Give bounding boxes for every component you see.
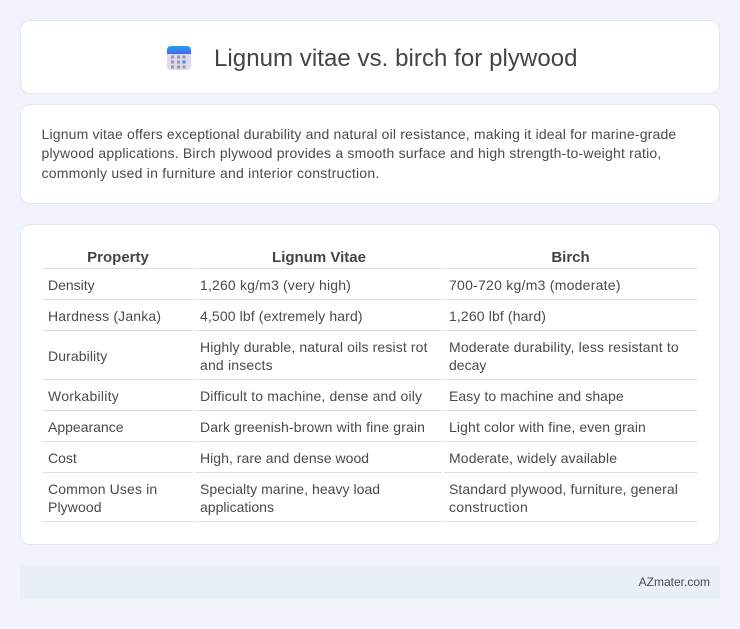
row: Common Uses: Standard plywood, furniture, general — [449, 481, 678, 497]
row: Durability: and insects — [200, 357, 273, 373]
header: Birch: Birch — [551, 249, 590, 266]
row: Common Uses: Plywood — [48, 499, 102, 515]
row: Common Uses — [48, 481, 678, 515]
row: Common Uses: Common Uses in — [48, 481, 157, 497]
icon: calendar — [167, 46, 191, 70]
footer credit: AZmater.com — [639, 575, 710, 589]
panel: description — [20, 104, 720, 204]
description text: Lignum vitae offers exceptional durability and natural oil resistance, making it ideal for marine-grade — [42, 126, 676, 142]
row: Workability: Workability — [48, 388, 119, 404]
row: Durability — [48, 339, 679, 373]
row: Workability: Difficult to machine, dense and oily — [200, 388, 422, 404]
row: Durability: Moderate durability, less resistant to — [449, 339, 679, 355]
header: Property: Property — [87, 249, 149, 266]
row: Density — [48, 277, 621, 293]
row: Cost: Moderate, widely available — [449, 450, 617, 466]
row: Appearance: Appearance — [48, 419, 124, 435]
row: Density: 700-720 kg/m3 (moderate) — [449, 277, 621, 293]
row: Common Uses: Specialty marine, heavy load — [200, 481, 380, 497]
row: Cost: Cost — [48, 450, 77, 466]
row: Common Uses: construction — [449, 499, 528, 515]
footer bar — [20, 565, 720, 599]
row: Appearance: Dark greenish-brown with fine grain — [200, 419, 425, 435]
row: Common Uses: applications — [200, 499, 274, 515]
row: Appearance: Light color with fine, even grain — [449, 419, 646, 435]
description text: plywood applications. Birch plywood provides a smooth surface and high strength-to-weight ratio, — [42, 145, 661, 161]
row: Durability: Highly durable, natural oils resist rot — [200, 339, 428, 355]
description text — [42, 126, 676, 181]
row: Workability — [48, 388, 624, 404]
row: Hardness — [48, 308, 546, 324]
header: Lignum Vitae: Lignum Vitae — [272, 249, 366, 266]
row: Density: 1,260 kg/m3 (very high) — [200, 277, 351, 293]
row: Cost — [48, 450, 617, 466]
panel: title card — [20, 20, 720, 94]
row: Durability: decay — [449, 357, 486, 373]
row: Hardness: 4,500 lbf (extremely hard) — [200, 308, 363, 324]
row: Durability: Durability — [48, 348, 107, 364]
row: Workability: Easy to machine and shape — [449, 388, 624, 404]
panel: comparison table — [20, 224, 720, 545]
row: Appearance — [48, 419, 646, 435]
row: Hardness: 1,260 lbf (hard) — [449, 308, 546, 324]
row: Hardness: Hardness (Janka) — [48, 308, 161, 324]
row: Density: Density — [48, 277, 95, 293]
description text: commonly used in furniture and interior construction. — [42, 165, 380, 181]
title: Lignum vitae vs. birch for plywood — [214, 45, 578, 72]
row: Cost: High, rare and dense wood — [200, 450, 369, 466]
